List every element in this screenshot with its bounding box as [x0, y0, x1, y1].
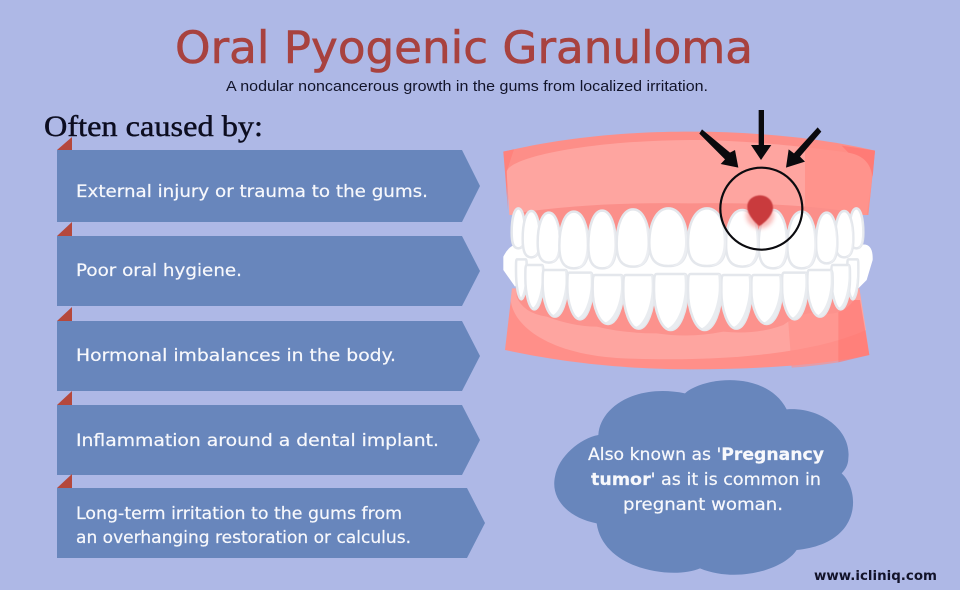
- cause 5: long-term irritation: Long-term irritation to the gums from: [76, 504, 402, 524]
- illustration: teeth and gums: [503, 110, 875, 369]
- callout text: tumor' as it is common in: [591, 470, 821, 490]
- highlight circle: [720, 168, 802, 250]
- white jaw band: [503, 244, 873, 288]
- arrow: center: [751, 110, 771, 160]
- cause 4: inflammation: Inflammation around a dental implant.: [76, 431, 439, 451]
- callout text: [588, 445, 824, 515]
- callout text: Also known as 'Pregnancy: [588, 445, 824, 465]
- callout text: pregnant woman.: [623, 495, 783, 515]
- upper gum: [503, 132, 875, 250]
- upper teeth: [512, 208, 863, 268]
- cause 5: long-term irritation: an overhanging restoration or calculus.: [76, 528, 411, 548]
- heading: often caused by: Often caused by:: [44, 110, 263, 143]
- panel: causes list: [57, 137, 485, 558]
- arrow: left: [699, 129, 738, 168]
- title: Oral Pyogenic Granuloma: [175, 23, 753, 74]
- cause 3: hormonal imbalances: Hormonal imbalances in the body.: [76, 346, 396, 366]
- subtitle: A nodular noncancerous growth in the gums from localized irritation.: [226, 78, 708, 95]
- lower gum: [505, 277, 869, 369]
- lower teeth: [516, 259, 858, 330]
- cause 2: poor hygiene: [57, 222, 480, 306]
- cause 4: inflammation: [57, 391, 480, 475]
- lesion: red granuloma: [746, 195, 774, 228]
- cause 5: long-term irritation: [57, 474, 485, 558]
- source url: www.icliniq.com: [814, 568, 937, 584]
- cause 1: external injury: External injury or trauma to the gums.: [76, 182, 428, 202]
- cause 3: hormonal imbalances: [57, 307, 480, 391]
- callout: cloud: [554, 380, 853, 575]
- arrow: right: [786, 127, 821, 168]
- cause 1: external injury: [57, 137, 480, 222]
- cause 2: poor hygiene: Poor oral hygiene.: [76, 261, 242, 281]
